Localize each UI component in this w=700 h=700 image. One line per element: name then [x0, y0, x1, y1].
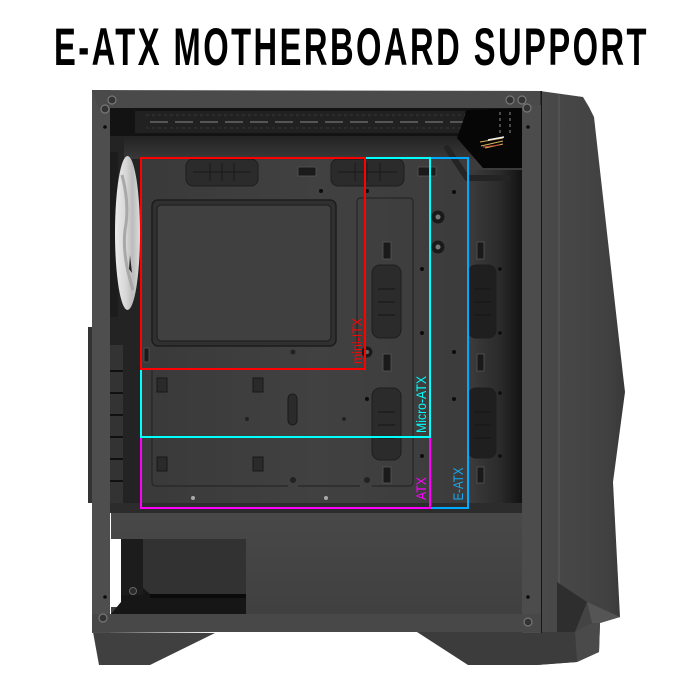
cable routing channel — [447, 148, 507, 178]
left pillar — [92, 90, 110, 633]
ATX outline: ATX — [414, 477, 429, 500]
bottom bar — [92, 614, 541, 632]
ATX outline — [141, 158, 430, 508]
Micro-ATX outline — [141, 158, 430, 437]
tray hooks — [157, 378, 263, 471]
top grommets — [186, 159, 404, 186]
oblong slot — [288, 394, 297, 425]
right pillar — [522, 105, 541, 633]
top bar — [92, 90, 540, 108]
tray slots — [144, 167, 484, 483]
shroud lip — [110, 503, 522, 513]
E-ATX outline: E-ATX — [451, 468, 466, 500]
PSU shroud — [111, 513, 522, 615]
lower tray outline — [152, 198, 413, 486]
vertical grommets — [372, 265, 496, 460]
top mesh — [110, 108, 522, 136]
CPU cutout — [152, 200, 336, 346]
cable bundle — [457, 108, 522, 168]
rear fan — [110, 152, 140, 317]
standoffs and holes — [191, 189, 502, 500]
interior roof — [124, 135, 522, 159]
left side bump — [88, 327, 94, 503]
computer case — [88, 90, 625, 665]
mini-ITX outline: mini-ITX — [350, 318, 365, 364]
tray right dark section — [468, 170, 522, 510]
Micro-ATX outline: Micro-ATX — [414, 376, 429, 433]
E-ATX outline — [141, 158, 468, 508]
left foot — [93, 632, 215, 665]
corner screws — [99, 96, 532, 626]
front panel — [537, 91, 625, 665]
mini-ITX outline — [141, 158, 365, 369]
interior left channel — [110, 135, 141, 510]
expansion slot vents — [110, 345, 123, 505]
PSU opening — [111, 539, 246, 614]
interior back tray — [110, 108, 522, 513]
right foot — [417, 632, 540, 665]
